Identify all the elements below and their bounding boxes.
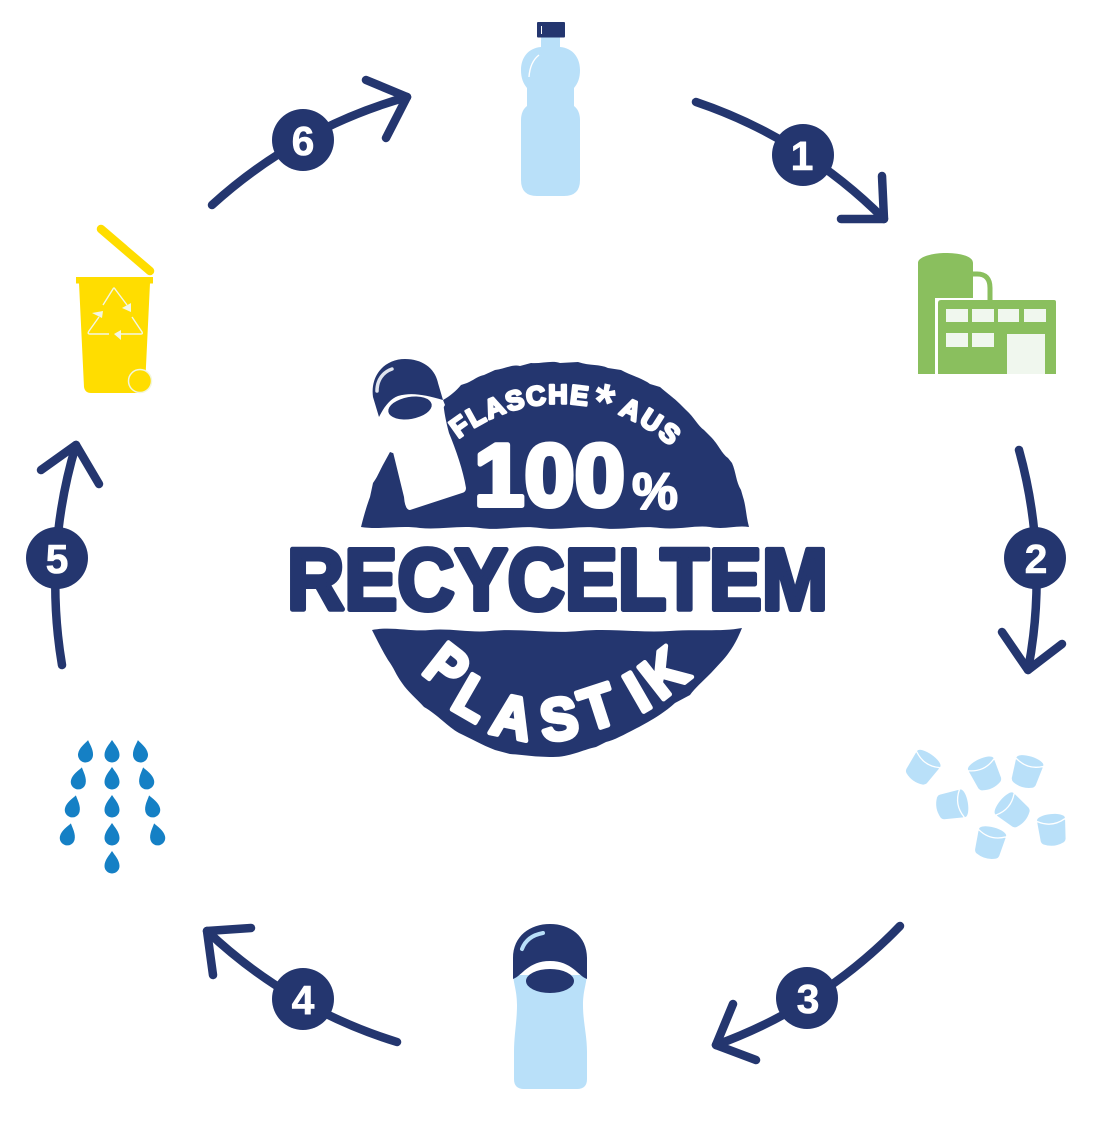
text: Plastik: P bbox=[413, 630, 481, 704]
icon: factory bbox=[918, 253, 1056, 374]
badge bottle body bbox=[379, 398, 466, 510]
arrow 6 bbox=[212, 80, 407, 205]
arrow 1: 1 bbox=[791, 133, 813, 179]
arrow 5: 5 bbox=[46, 536, 68, 582]
icon: yellow recycling bin bbox=[76, 229, 153, 393]
arrow 2: 2 bbox=[1025, 536, 1047, 582]
text: asterisk: * bbox=[588, 372, 620, 433]
badge bottle mouth bbox=[386, 393, 434, 423]
text: Plastik: I bbox=[614, 660, 661, 725]
arrow 1 bbox=[696, 102, 884, 219]
central badge bbox=[287, 359, 828, 757]
arrow 2 bbox=[1002, 450, 1066, 670]
arrow 6: 6 bbox=[292, 118, 314, 164]
text: aus: AUS bbox=[617, 398, 680, 445]
text: Plastik: L bbox=[442, 661, 504, 735]
arrow 4 bbox=[207, 928, 397, 1042]
text: 100: 100 bbox=[474, 426, 625, 524]
badge upper half bbox=[361, 362, 749, 529]
icon: water drops bbox=[58, 739, 167, 874]
arrow 4: 4 bbox=[292, 977, 315, 1023]
text: Plastik: T bbox=[572, 671, 625, 744]
text: Plastik bbox=[413, 630, 701, 755]
arrow 5 bbox=[26, 445, 99, 665]
arrow 3 bbox=[716, 926, 900, 1060]
badge lower half bbox=[372, 628, 742, 757]
text: percent: % bbox=[632, 463, 678, 521]
icon: plastic flakes bbox=[902, 747, 1068, 862]
badge bottle highlight bbox=[377, 369, 392, 391]
text: Recyceltem: RECYCELTEM bbox=[287, 532, 828, 628]
text: Plastik: S bbox=[536, 685, 582, 755]
text: Flasche: FLASCHE bbox=[448, 384, 590, 439]
badge bottle cap bbox=[373, 359, 443, 417]
icon: preform bottle bbox=[513, 924, 587, 1089]
text: Plastik: K bbox=[628, 635, 701, 712]
icon: plastic bottle bbox=[521, 22, 580, 196]
text: Plastik: A bbox=[485, 682, 538, 754]
arrow 3: 3 bbox=[797, 976, 819, 1022]
